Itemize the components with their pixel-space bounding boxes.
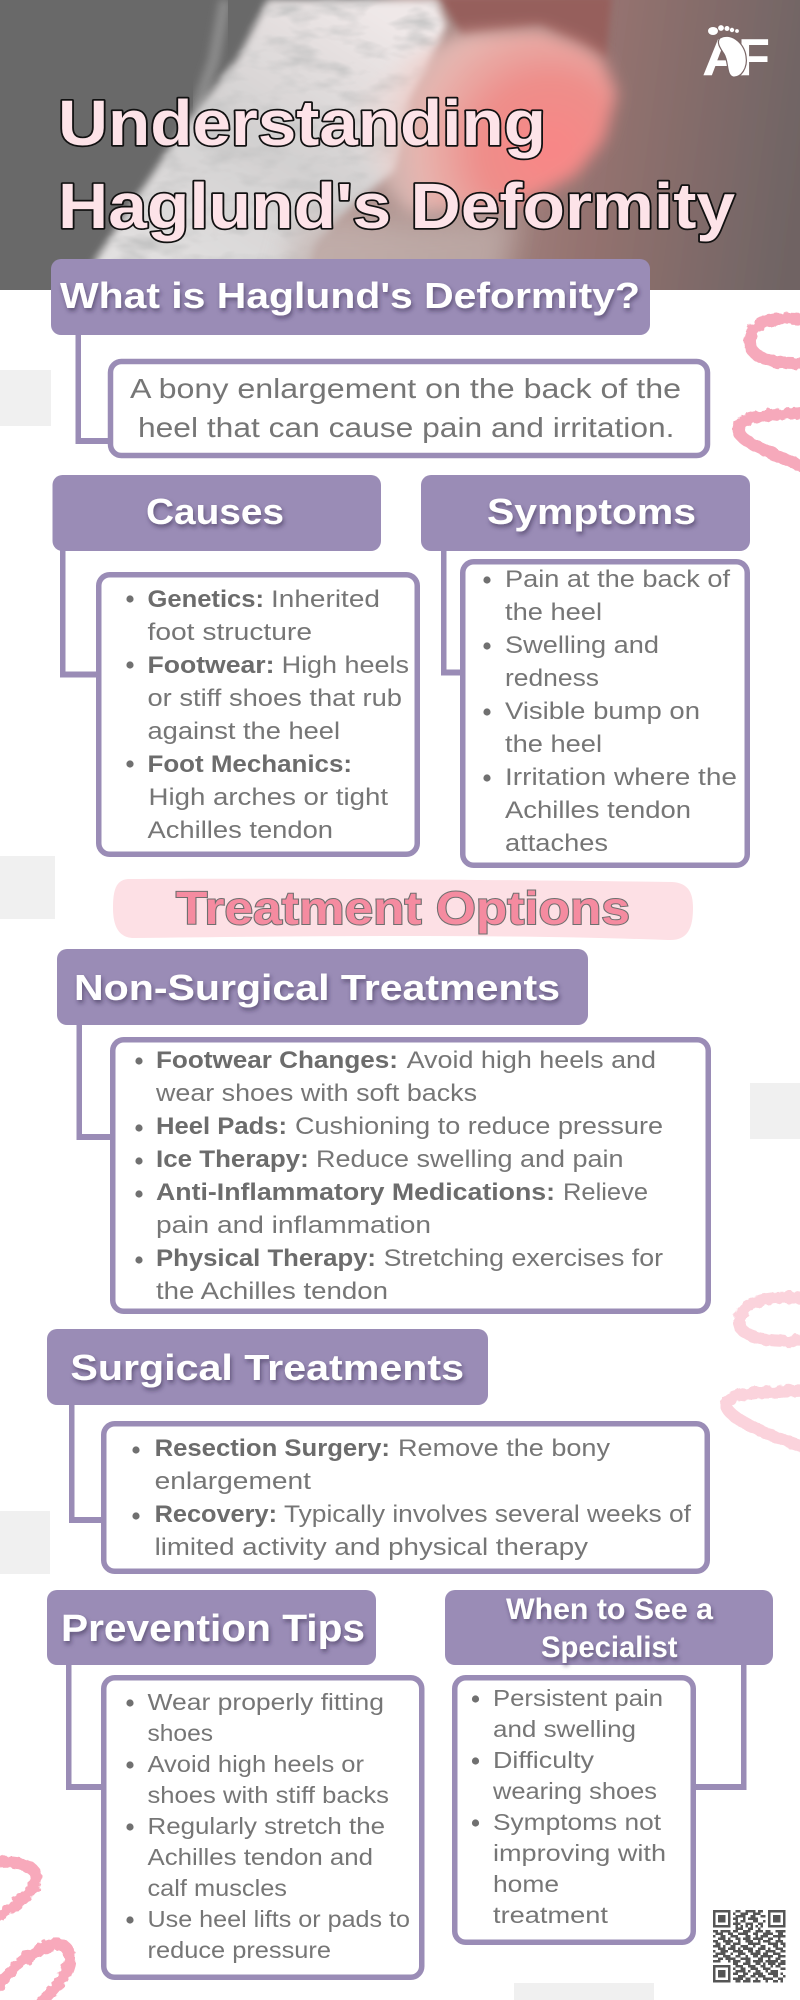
non-surgical list: Heel Pads: [156,1113,287,1140]
surgical list: Resection Surgery: [155,1435,390,1462]
symptoms list: Achilles tendon [505,797,691,824]
symptoms list: attaches [505,830,608,857]
non-surgical list: wear shoes with soft backs [155,1080,477,1107]
heading bar: Non-Surgical Treatments [74,967,560,1008]
logo: A [702,29,744,87]
non-surgical list: Footwear Changes: [156,1047,398,1074]
banner: treatment options: Treatment Options [176,882,630,934]
non-surgical list: Stretching exercises for [384,1245,663,1272]
connector [692,1660,746,1790]
title: Haglund's Deformity [58,170,735,242]
logo [702,25,770,87]
surgical list: enlargement [155,1468,311,1495]
heading bar [421,475,750,551]
panel: symptoms [421,475,750,865]
non-surgical list: Avoid high heels and [407,1047,656,1074]
non-surgical list: the Achilles tendon [156,1278,388,1305]
title: Understanding [58,87,546,159]
panel: prevention tips [47,1590,422,1977]
logo: F [738,29,770,87]
causes list: Achilles tendon [148,817,333,844]
symptoms list: the heel [505,731,602,758]
title [58,87,735,242]
specialist list: wearing shoes [492,1778,657,1804]
prevention list: Use heel lifts or pads to [148,1906,410,1932]
definition box: A bony enlargement on the back of the [130,373,681,404]
prevention list: calf muscles [148,1875,287,1901]
specialist list: and swelling [493,1716,636,1742]
panel: what is Haglund's deformity [51,259,708,456]
prevention list: shoes with stiff backs [148,1782,389,1808]
specialist list: improving with [493,1840,666,1866]
prevention list: Avoid high heels or [148,1751,364,1777]
panel: when to see a specialist [445,1590,773,1942]
connector [76,330,111,444]
causes list: High arches or tight [148,784,388,811]
causes list: Genetics: [148,586,264,613]
symptoms list [463,562,747,865]
heading bar: Surgical Treatments [70,1347,464,1388]
header x-ray image [0,0,800,290]
heading bar: When to See a [506,1593,713,1626]
prevention list: reduce pressure [148,1937,331,1963]
causes list: High heels [282,652,409,679]
surgical list [104,1424,707,1571]
symptoms list: Visible bump on [505,698,700,725]
heading bar [47,1590,376,1665]
causes list: Footwear: [148,652,274,679]
definition box [110,362,708,456]
symptoms list: Swelling and [505,632,659,659]
heading bar [47,1329,488,1405]
non-surgical list: Relieve [563,1179,648,1206]
causes list: foot structure [148,619,312,646]
heading bar: Causes [146,491,284,532]
QR code [713,1910,786,1982]
non-surgical list: Reduce swelling and pain [316,1146,624,1173]
heading bar: What is Haglund's Deformity? [60,275,640,316]
non-surgical list: Physical Therapy: [156,1245,376,1272]
specialist list [455,1678,693,1942]
heading bar: Prevention Tips [61,1608,365,1650]
symptoms list: redness [505,665,599,692]
non-surgical list: Anti-Inflammatory Medications: [156,1179,555,1206]
symptoms list: Pain at the back of [505,566,730,593]
symptoms list: the heel [505,599,602,626]
connector [60,545,100,678]
prevention list: shoes [148,1720,213,1746]
specialist list: Persistent pain [493,1685,663,1711]
causes list [99,575,417,854]
prevention list: Achilles tendon and [148,1844,373,1870]
symptoms list: Irritation where the [505,764,737,791]
causes list: Foot Mechanics: [148,751,352,778]
surgical list: Remove the bony [398,1435,610,1462]
definition box: heel that can cause pain and irritation. [138,412,674,443]
panel: non-surgical treatments [57,949,708,1311]
banner: treatment options [113,879,693,940]
connector [66,1660,104,1790]
specialist list: Difficulty [493,1747,595,1773]
connector [441,545,464,676]
heading bar [52,475,381,551]
panel: surgical treatments [47,1329,707,1571]
decorative light pink squiggles, right [726,1298,800,1448]
specialist list: Symptoms not [493,1809,662,1835]
non-surgical list: pain and inflammation [156,1212,431,1239]
connector [76,1020,112,1140]
non-surgical list: Cushioning to reduce pressure [295,1113,663,1140]
causes list: Inherited [271,586,380,613]
specialist list: treatment [493,1902,609,1928]
prevention list [104,1678,422,1977]
decorative pink squiggles, bottom left [0,1862,70,2000]
connector [69,1400,104,1523]
surgical list: limited activity and physical therapy [155,1534,588,1561]
heading bar [57,949,588,1025]
panel: causes [52,475,417,854]
prevention list: Wear properly fitting [148,1689,384,1715]
heading bar: Symptoms [487,491,696,532]
heading bar: Specialist [541,1631,678,1664]
prevention list: Regularly stretch the [148,1813,385,1839]
heading bar [445,1590,773,1665]
causes list: against the heel [148,718,340,745]
specialist list: home [493,1871,559,1897]
causes list: or stiff shoes that rub [148,685,402,712]
surgical list: Typically involves several weeks of [284,1501,691,1528]
non-surgical list: Ice Therapy: [156,1146,309,1173]
heading bar [51,259,650,335]
decorative pink squiggles, top right [738,319,800,468]
non-surgical list [113,1040,708,1311]
surgical list: Recovery: [155,1501,277,1528]
